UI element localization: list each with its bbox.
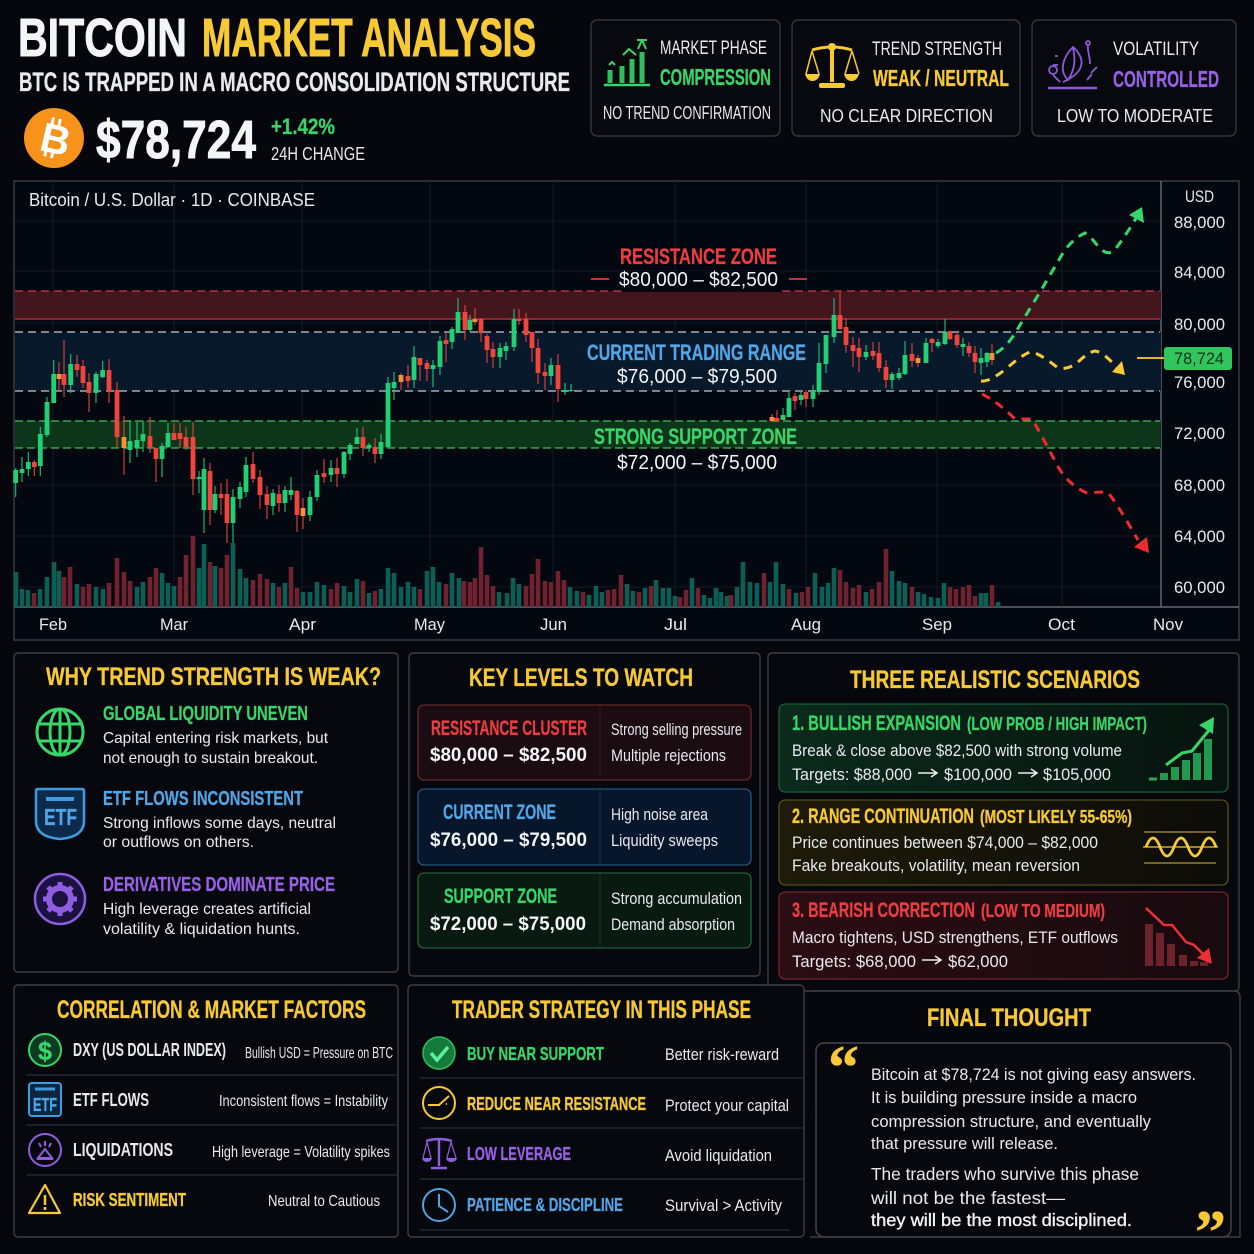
icon: etf shield: ETF <box>44 804 77 830</box>
current price tag <box>1137 347 1232 370</box>
level: support zone: Demand absorption <box>611 915 735 934</box>
level: resistance cluster: Multiple rejections <box>611 746 726 765</box>
price axis: 84,000 <box>1174 263 1225 282</box>
projection: bearish arrow <box>982 394 1149 553</box>
icon: balance scale <box>805 43 859 88</box>
item: global liquidity: GLOBAL LIQUIDITY UNEVEN <box>103 703 308 725</box>
heading: KEY LEVELS TO WATCH <box>469 664 693 692</box>
time axis <box>39 615 1183 634</box>
time axis: Oct <box>1048 615 1075 634</box>
label: resistance zone: $80,000 – $82,500 <box>619 269 778 291</box>
row: low leverage <box>422 1139 772 1168</box>
heading: WHY TREND STRENGTH IS WEAK? <box>46 663 381 691</box>
scenario: bullish <box>779 704 1228 792</box>
row: buy near support: Better risk-reward <box>665 1045 779 1064</box>
row: low leverage: Avoid liquidation <box>665 1146 772 1165</box>
label: current trading range: CURRENT TRADING RANGE <box>587 340 806 365</box>
level: resistance cluster: $80,000 – $82,500 <box>430 745 587 766</box>
item: derivatives: High leverage creates artificial <box>103 901 311 918</box>
label: strong support zone <box>594 424 797 474</box>
row: etf flows: ETF FLOWS <box>73 1090 149 1110</box>
row: risk sentiment <box>29 1185 380 1213</box>
scenario: bullish: Targets: $88,000 <box>792 765 912 784</box>
icon: opening quote: “ <box>828 1034 859 1102</box>
chart title: Bitcoin / U.S. Dollar · 1D · COINBASE <box>29 190 315 210</box>
time axis: Aug <box>791 615 821 634</box>
row: dxy: DXY (US DOLLAR INDEX) <box>73 1040 226 1060</box>
icon: liquidation burst <box>29 1134 61 1166</box>
icon: etf shield <box>36 789 84 839</box>
label: resistance zone: RESISTANCE ZONE <box>620 244 777 269</box>
volume bars <box>16 536 998 607</box>
level: resistance cluster <box>418 705 751 780</box>
scenario: bearish: $62,000 <box>948 952 1008 971</box>
item: derivatives <box>35 874 335 938</box>
icon: scale <box>422 1139 457 1168</box>
icon: volatility squiggle <box>1048 41 1097 88</box>
price: $78,724 <box>96 110 256 170</box>
item: etf flows: or outflows on others. <box>103 834 254 851</box>
current price tag: 78,724 <box>1174 349 1224 368</box>
panel: final thought <box>810 991 1240 1254</box>
scenario: range <box>779 800 1228 885</box>
icon: dollar: $ <box>38 1036 53 1066</box>
card: volatility <box>1032 20 1236 136</box>
row: reduce near resistance: Protect your capital <box>665 1096 789 1115</box>
level: support zone <box>418 873 751 948</box>
item: etf flows <box>36 788 336 851</box>
price axis: 88,000 <box>1174 213 1225 232</box>
icon: reduce circle <box>423 1087 455 1119</box>
scenario: bearish: Targets: $68,000 <box>792 952 916 971</box>
time axis: Apr <box>289 615 316 634</box>
row: patience and discipline: PATIENCE & DISCIPLINE <box>467 1195 623 1215</box>
scenario: bullish: Break & close above $82,500 with strong volume <box>792 741 1122 760</box>
icon: rising bars <box>604 40 650 85</box>
item: global liquidity: not enough to sustain breakout. <box>103 750 318 767</box>
price axis: 68,000 <box>1174 476 1225 495</box>
price axis: 76,000 <box>1174 373 1225 392</box>
card: trend strength: NO CLEAR DIRECTION <box>820 106 993 126</box>
24h change: 24H CHANGE <box>271 144 365 164</box>
heading: TRADER STRATEGY IN THIS PHASE <box>452 996 751 1024</box>
icon: oscillating wave <box>1143 832 1218 863</box>
level: current zone: Liquidity sweeps <box>611 831 718 850</box>
subtitle: BTC IS TRAPPED IN A MACRO CONSOLIDATION STRUCTURE <box>19 67 570 97</box>
scenario: range: 2. RANGE CONTINUATION <box>792 805 974 828</box>
row: etf flows <box>29 1083 388 1116</box>
time axis: Nov <box>1153 615 1183 634</box>
item: global liquidity <box>37 703 329 767</box>
label: current trading range <box>587 340 806 388</box>
time axis: Feb <box>39 615 67 634</box>
row: reduce near resistance <box>423 1087 789 1119</box>
heading: FINAL THOUGHT <box>927 1004 1091 1032</box>
item: derivatives: volatility & liquidation hunts. <box>103 921 300 938</box>
candlesticks <box>16 292 992 543</box>
icon: falling bars <box>1146 908 1212 966</box>
level: support zone: $72,000 – $75,000 <box>430 914 586 935</box>
icon: bitcoin coin <box>24 108 84 168</box>
panel: correlation and market factors <box>14 985 398 1237</box>
price axis: 60,000 <box>1174 578 1225 597</box>
card: market phase <box>591 20 780 136</box>
card: market phase: MARKET PHASE <box>660 38 767 59</box>
time axis: May <box>414 615 445 634</box>
price axis: 72,000 <box>1174 424 1225 443</box>
time axis: Jun <box>540 615 567 634</box>
row: dxy <box>29 1034 393 1066</box>
row: dxy: Bullish USD = Pressure on BTC <box>245 1045 393 1062</box>
time axis: Jul <box>664 615 687 634</box>
icon: check <box>423 1037 455 1069</box>
panel: trader strategy <box>408 985 804 1237</box>
row: risk sentiment: RISK SENTIMENT <box>73 1190 186 1210</box>
title <box>18 8 536 68</box>
price chart panel <box>14 181 1239 640</box>
quote text: will not be the fastest— <box>870 1188 1066 1208</box>
panel: key levels to watch <box>409 653 760 976</box>
card: trend strength: TREND STRENGTH <box>872 39 1002 60</box>
price axis: 64,000 <box>1174 527 1225 546</box>
level: resistance cluster: RESISTANCE CLUSTER <box>431 717 587 740</box>
quote text: The traders who survive this phase <box>871 1164 1139 1184</box>
icon: rising bars <box>1149 717 1214 780</box>
level: support zone: Strong accumulation <box>611 889 742 908</box>
resistance zone band <box>15 291 1161 319</box>
quote text <box>870 1065 1196 1230</box>
row: patience and discipline <box>423 1189 782 1221</box>
row: liquidations: LIQUIDATIONS <box>73 1140 173 1160</box>
icon: etf badge: ETF <box>33 1095 57 1115</box>
icon: warning triangle <box>29 1185 60 1213</box>
scenario: bullish: 1. BULLISH EXPANSION <box>792 712 961 735</box>
support zone band <box>15 421 1161 448</box>
price axis: 80,000 <box>1174 315 1225 334</box>
level: resistance cluster: Strong selling pressure <box>611 720 742 739</box>
level: current zone <box>418 789 751 865</box>
card: trend strength: WEAK / NEUTRAL <box>873 65 1009 91</box>
scenario: range: Fake breakouts, volatility, mean reversion <box>792 856 1080 875</box>
heading: THREE REALISTIC SCENARIOS <box>850 666 1140 694</box>
quote text: compression structure, and eventually <box>871 1112 1151 1131</box>
heading: CORRELATION & MARKET FACTORS <box>57 996 366 1024</box>
icon: bitcoin coin: B <box>36 114 75 165</box>
price axis: USD <box>1185 187 1214 206</box>
panel: three realistic scenarios <box>768 653 1239 991</box>
scenario: bullish: $100,000 <box>944 765 1012 784</box>
quote text: that pressure will release. <box>871 1134 1058 1153</box>
label: strong support zone: STRONG SUPPORT ZONE <box>594 424 797 449</box>
title: MARKET ANALYSIS <box>202 8 536 68</box>
24h change: +1.42% <box>271 114 335 139</box>
card: market phase: COMPRESSION <box>660 64 771 90</box>
scenario: range: (MOST LIKELY 55-65%) <box>980 807 1132 827</box>
level: current zone: CURRENT ZONE <box>443 801 556 824</box>
row: low leverage: LOW LEVERAGE <box>467 1144 571 1164</box>
item: derivatives: DERIVATIVES DOMINATE PRICE <box>103 874 335 896</box>
item: etf flows: ETF FLOWS INCONSISTENT <box>103 788 303 810</box>
card: market phase: NO TREND CONFIRMATION <box>603 103 771 123</box>
trading range band <box>15 332 1161 391</box>
header: title and price <box>18 8 570 170</box>
card: trend strength <box>792 20 1020 136</box>
row: etf flows: Inconsistent flows = Instability <box>219 1093 388 1110</box>
row: buy near support <box>423 1037 779 1069</box>
price axis <box>1174 187 1225 597</box>
row: buy near support: BUY NEAR SUPPORT <box>467 1044 604 1064</box>
icon: globe <box>37 709 83 755</box>
row: risk sentiment: Neutral to Cautious <box>268 1193 380 1210</box>
level: current zone: High noise area <box>611 805 708 824</box>
projection: bullish arrow <box>996 207 1144 353</box>
icon: clock <box>423 1189 455 1221</box>
panel: why trend strength is weak <box>14 653 398 972</box>
icon: dollar <box>29 1034 61 1066</box>
label: strong support zone: $72,000 – $75,000 <box>617 452 777 474</box>
quote box <box>816 1034 1231 1254</box>
item: global liquidity: Capital entering risk markets, but <box>103 730 329 747</box>
card: volatility: LOW TO MODERATE <box>1057 106 1213 126</box>
row: patience and discipline: Survival > Activity <box>665 1196 782 1215</box>
scenario: range: Price continues between $74,000 – $82,000 <box>792 833 1098 852</box>
label: current trading range: $76,000 – $79,500 <box>617 366 777 388</box>
item: etf flows: Strong inflows some days, neutral <box>103 815 336 832</box>
row: reduce near resistance: REDUCE NEAR RESISTANCE <box>467 1094 646 1114</box>
time axis: Mar <box>160 615 188 634</box>
title: BITCOIN <box>18 8 187 68</box>
level: support zone: SUPPORT ZONE <box>444 885 557 908</box>
quote text: they will be the most disciplined. <box>871 1210 1132 1230</box>
scenario: bearish <box>779 892 1228 979</box>
scenario: bullish: (LOW PROB / HIGH IMPACT) <box>967 714 1147 734</box>
label: resistance zone <box>591 244 807 292</box>
level: current zone: $76,000 – $79,500 <box>430 830 587 851</box>
time axis: Sep <box>922 615 952 634</box>
quote text: It is building pressure inside a macro <box>871 1088 1137 1107</box>
quote text: Bitcoin at $78,724 is not giving easy answers. <box>871 1065 1196 1084</box>
scenario: bearish: Macro tightens, USD strengthens, ETF outflows <box>792 928 1118 947</box>
scenario: bearish: 3. BEARISH CORRECTION <box>792 899 975 922</box>
icon: etf badge <box>29 1083 61 1116</box>
24h change <box>271 114 365 164</box>
scenario: bearish: (LOW TO MEDIUM) <box>981 901 1105 921</box>
icon: gear <box>35 874 85 924</box>
card: volatility: VOLATILITY <box>1113 39 1199 60</box>
row: liquidations: High leverage = Volatility spikes <box>212 1144 390 1161</box>
projection: sideways arrow <box>981 351 1125 381</box>
scenario: bullish: $105,000 <box>1043 765 1111 784</box>
row: liquidations <box>29 1134 390 1166</box>
